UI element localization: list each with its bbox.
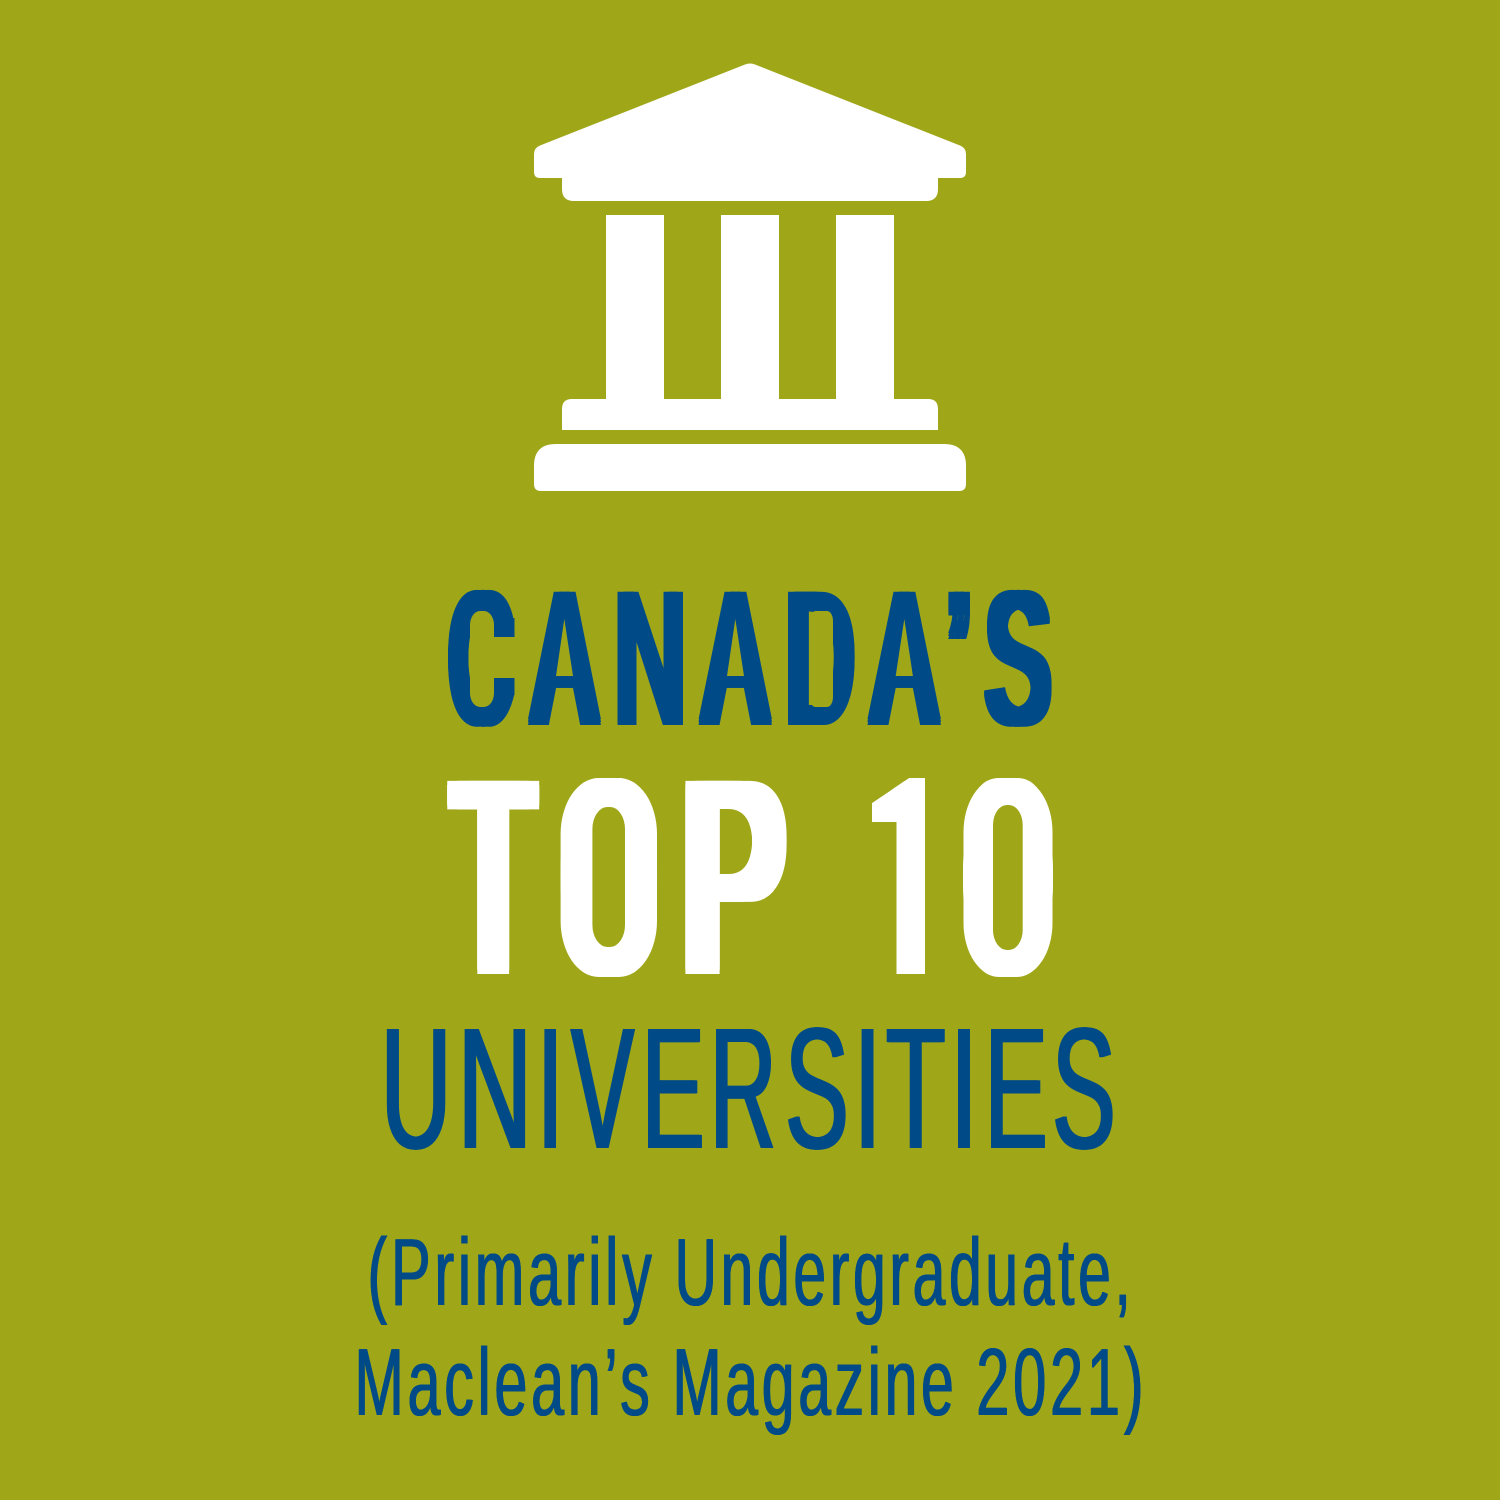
heading: CANADA'S: A [534, 556, 595, 762]
heading: CANADA'S [450, 556, 1056, 762]
text block: source note: 2021) [977, 1329, 1148, 1436]
heading: UNIVERSITIES: R [710, 991, 777, 1185]
text block: source note [355, 1219, 1148, 1436]
heading: UNIVERSITIES: I [855, 991, 881, 1185]
heading: TOP 10: 1 [883, 727, 935, 1028]
text block: source note: Magazine [673, 1329, 958, 1436]
heading: CANADA'S: N [616, 556, 685, 762]
text block: source note: (Primarily [368, 1219, 656, 1326]
heading: CANADA'S: S [986, 556, 1050, 762]
heading: CANADA'S: A [704, 556, 766, 762]
heading: TOP 10: O [565, 727, 652, 1028]
heading: UNIVERSITIES: E [642, 991, 705, 1185]
heading: UNIVERSITIES: V [572, 991, 635, 1185]
heading: CANADA'S: C [450, 556, 512, 762]
heading: UNIVERSITIES: I [538, 991, 564, 1185]
heading: UNIVERSITIES: T [886, 991, 946, 1185]
heading: UNIVERSITIES: E [985, 991, 1048, 1185]
heading: UNIVERSITIES: I [951, 991, 978, 1185]
heading: CANADA'S: D [786, 556, 853, 762]
heading: UNIVERSITIES: S [1053, 991, 1116, 1185]
heading: TOP 10: 0 [967, 727, 1049, 1028]
heading: CANADA'S: A [873, 556, 935, 762]
icon: university building [534, 64, 966, 491]
heading: CANADA'S: ’ [948, 556, 970, 762]
heading: UNIVERSITIES: U [381, 991, 452, 1185]
heading: TOP 10: T [454, 727, 532, 1028]
heading: TOP 10 [454, 727, 1052, 1028]
heading: UNIVERSITIES: S [786, 991, 849, 1185]
heading: TOP 10: P [683, 727, 782, 1028]
text block: source note: Undergraduate, [675, 1219, 1135, 1326]
heading: UNIVERSITIES: N [458, 991, 532, 1185]
text block: source note: Maclean’s [355, 1329, 654, 1436]
